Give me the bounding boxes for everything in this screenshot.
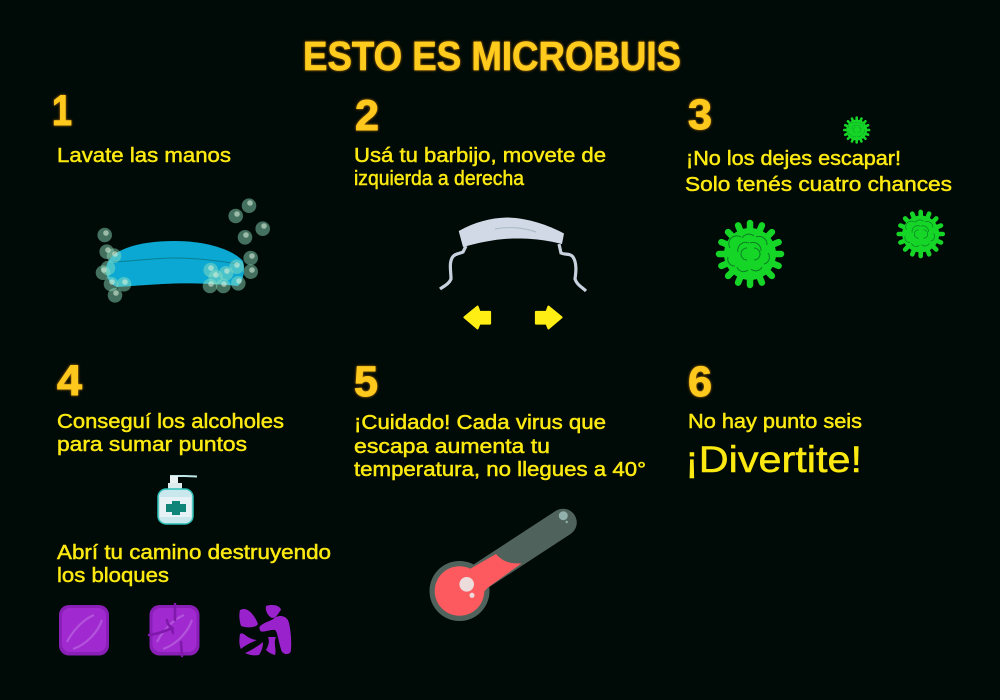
title: ESTO ES MICROBUIS bbox=[303, 33, 681, 79]
icon: medium virus bbox=[899, 212, 943, 256]
arrow: right bbox=[536, 307, 562, 328]
number 2: 2 bbox=[355, 92, 379, 140]
panel: step 5 temperature bbox=[354, 358, 646, 621]
instruction text 4: para sumar puntos bbox=[57, 433, 247, 456]
instruction text 5 bbox=[354, 411, 646, 481]
instruction text 5: temperatura, no llegues a 40° bbox=[354, 458, 646, 481]
number 6: 6 bbox=[688, 358, 712, 406]
panel: step 4 alcohol and blocks bbox=[57, 357, 331, 656]
instruction text 4b: Abrí tu camino destruyendo bbox=[57, 541, 331, 564]
number 5: 5 bbox=[354, 358, 378, 406]
instruction text 4 bbox=[57, 410, 284, 456]
number 1: 1 bbox=[52, 87, 72, 135]
instruction text 4b bbox=[57, 541, 331, 587]
panel: step 2 use the mask bbox=[354, 92, 606, 328]
instruction text 5: ¡Cuidado! Cada virus que bbox=[354, 411, 606, 434]
panel: step 3 viruses bbox=[685, 91, 952, 285]
instruction text 2: Usá tu barbijo, movete de bbox=[354, 144, 606, 167]
instruction text 2: izquierda a derecha bbox=[354, 167, 525, 190]
panel: step 6 have fun bbox=[685, 358, 862, 480]
icon: white mask with straps bbox=[440, 218, 586, 291]
icon: large virus bbox=[719, 223, 781, 285]
icon: blue face mask with soap bubbles bbox=[96, 198, 270, 303]
instruction text 3 bbox=[685, 147, 952, 196]
panel: step 1 wash hands bbox=[52, 87, 270, 303]
instruction text 2 bbox=[354, 144, 606, 190]
instruction text 5: escapa aumenta tu bbox=[354, 435, 550, 458]
instruction text 4b: los bloques bbox=[57, 564, 169, 587]
icon: broken purple block bbox=[239, 605, 291, 655]
instruction text 6: No hay punto seis bbox=[688, 410, 862, 433]
closing message: ¡Divertite! bbox=[685, 439, 862, 480]
number 4: 4 bbox=[57, 357, 82, 405]
icon: cracked purple block bbox=[149, 604, 200, 656]
arrow: left bbox=[464, 307, 490, 328]
instruction text 3: Solo tenés cuatro chances bbox=[685, 173, 952, 196]
instruction text 4: Conseguí los alcoholes bbox=[57, 410, 284, 433]
instruction text 1: Lavate las manos bbox=[57, 144, 231, 167]
number 3: 3 bbox=[688, 91, 712, 139]
icon: intact purple block bbox=[59, 605, 109, 656]
instruction text 3: ¡No los dejes escapar! bbox=[686, 147, 901, 170]
icon: alcohol gel bottle bbox=[158, 476, 197, 524]
icon: small virus bbox=[844, 118, 869, 142]
icon: thermometer bbox=[430, 511, 568, 621]
